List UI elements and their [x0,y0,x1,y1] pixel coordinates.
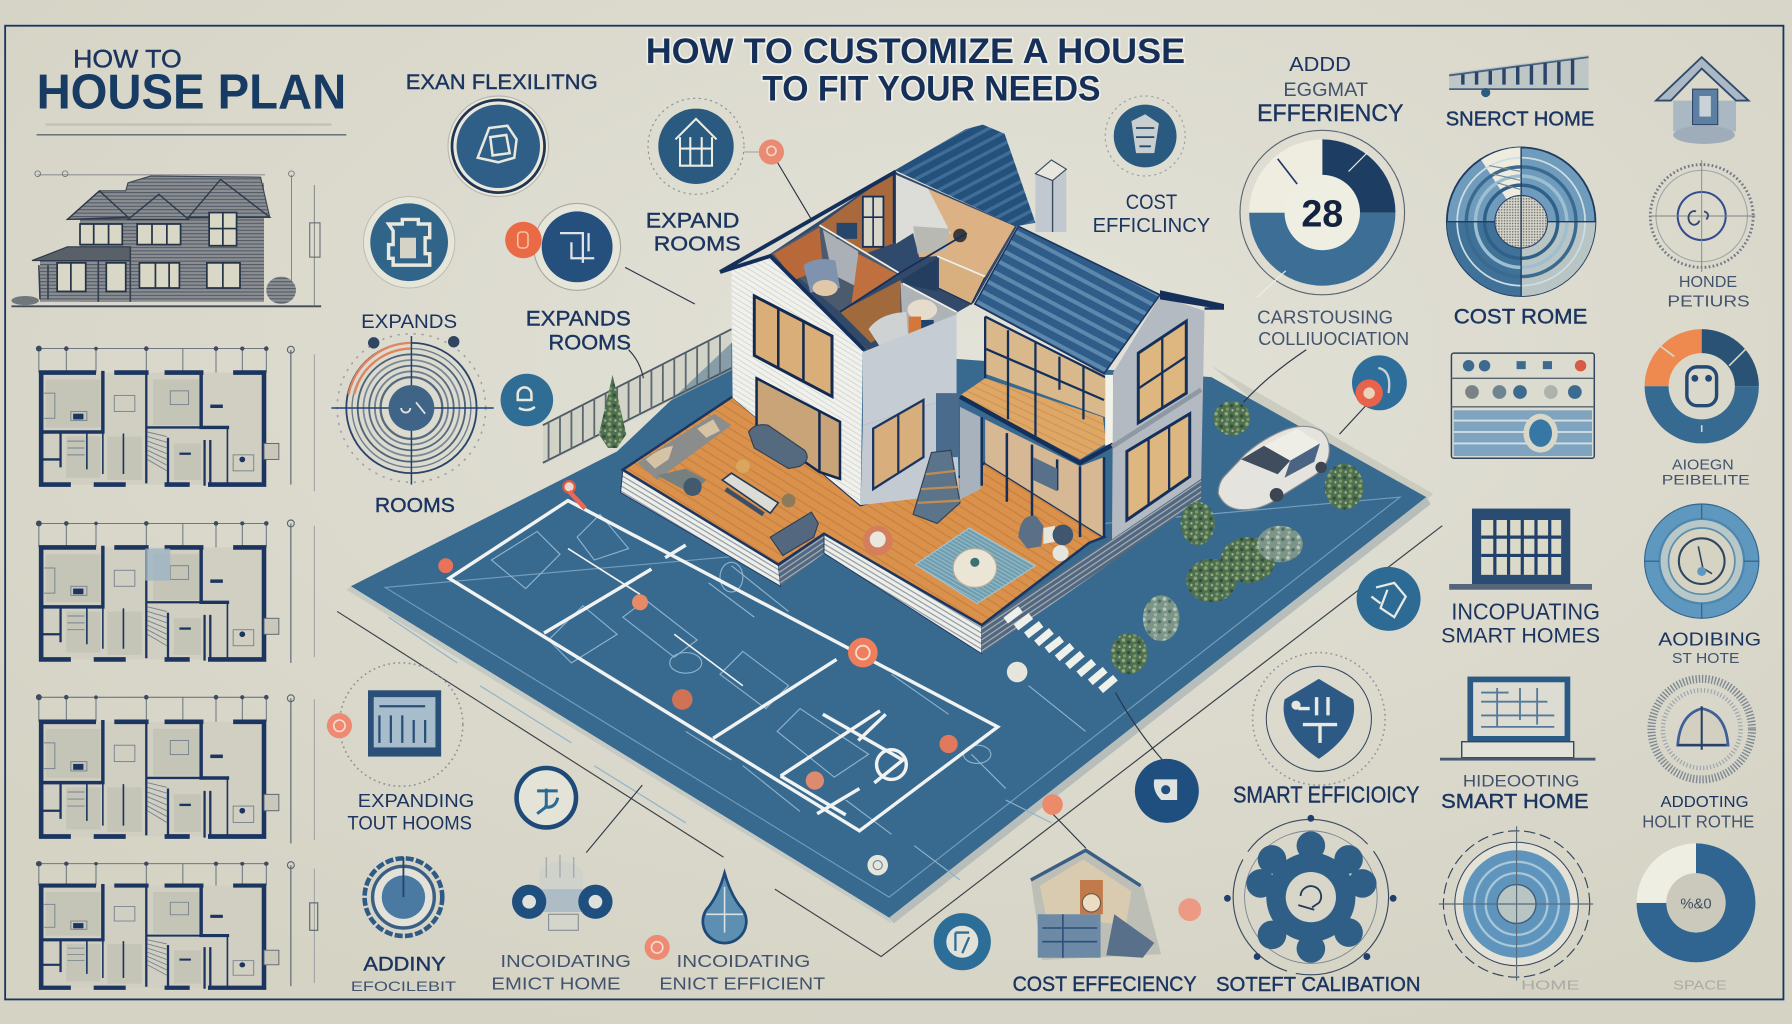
icon: navy circle [1135,759,1199,823]
fence [543,329,731,465]
icon: gauge [365,857,442,936]
subtitle: how to house plan [37,45,346,135]
small cutaway house [1031,850,1161,960]
room d [903,256,985,304]
label: rooms: ROOMS [375,494,455,517]
label: expand rooms [646,207,741,255]
callout pin: house top [1042,794,1063,815]
plan dimension lines [287,346,318,986]
orange pouf [863,526,893,555]
gauge ring [1650,160,1755,272]
floor plan 2 [36,520,279,659]
label: aiogen perielite: AIOEGN [1672,458,1734,474]
label: adding home: AODIBING [1658,629,1761,650]
sofa front [770,512,818,555]
icon: house right [1656,57,1749,144]
donut chart: 28: 28 [1301,192,1343,234]
label: customizing calibration: CARSTOUSING [1257,306,1393,327]
donut chart: orange [1645,329,1759,443]
label: home faint: HOME [1521,979,1579,993]
label: smart efficiency: SMART EFFICIOICY [1233,781,1419,807]
label: cost efficiency top: EFFICLINCY [1093,214,1211,237]
label: adding home: ST HOTE [1672,651,1740,667]
label: adding hout home: HOLIT ROTHE [1642,811,1754,831]
label: adding hout home: ADDOTING [1661,794,1749,811]
main title: HOW TO CUSTOMIZE A HOUSE [646,31,1185,71]
callout pin: house right [1178,898,1201,921]
donut chart: quarter: %&0 [1680,897,1712,913]
rear roof [895,125,1035,226]
icon: twin speakers [512,855,613,930]
callout pin: expand rooms [759,139,811,219]
car [1218,426,1329,510]
label: incorporating efficient [659,951,826,994]
chairs [1018,516,1073,561]
donut chart: quarter [1637,843,1755,962]
callout pin: expanding [327,713,352,738]
label: expanding rooms [347,790,474,835]
label: cost rome: COST ROME [1454,303,1587,328]
house elevation drawing [11,171,321,306]
mesh ring [1651,679,1752,779]
label: adding energy efficiency: EGGMAT [1283,79,1368,101]
lower front room [982,417,1104,537]
radar diagram [1439,826,1593,981]
label: expands rooms [526,306,631,355]
round table [953,549,997,587]
label: incorporating smart homes: SMART HOMES [1441,622,1600,647]
room c [880,175,1015,277]
right upper window [1138,321,1186,423]
label: incorporating smart home: HIDEOOTING [1463,771,1579,790]
tree [599,375,626,448]
target ring diagram [331,334,494,485]
label: adding energy efficiency [1257,53,1403,127]
gear diagram [1224,815,1397,975]
icon: water drop [703,873,746,943]
label: space faint: SPACE [1673,979,1727,993]
room a [770,225,899,312]
label: incorporating smart home: INCOIDATING [501,951,631,971]
room b [819,171,894,254]
label: customizing calibration [1257,306,1409,349]
plan markers [438,481,1027,875]
label: customizing calibration: COLLIUOCIATION [1258,328,1409,349]
label: adding energy efficiency: ADDD [1289,53,1351,76]
label: expands rooms: ROOMS [549,330,631,355]
main title: TO FIT YOUR NEEDS [762,69,1101,109]
grey side wall [863,314,957,425]
label: home features [1667,274,1750,310]
label: adding efficient: ADDINY [363,953,446,975]
label: expands: EXPANDS [361,311,457,333]
label: cost efficiency bottom: COST EFFECIENCY [1013,971,1197,996]
label: expand rooms: EXPAND [646,207,739,232]
label: expanding rooms: EXPANDING [358,790,474,811]
house model [621,125,1224,654]
label: adding energy efficiency: EFFERIENCY [1257,100,1403,127]
right lower window [1127,414,1190,520]
eave edges [720,171,896,350]
bushes [1111,401,1363,674]
label: exan flexilitng: EXAN FLEXILITNG [406,69,598,94]
icon: expanding rooms monitor [339,663,463,786]
site boundary lines [337,526,1442,957]
right gable wall [1112,296,1205,539]
label: aiogen perielite [1662,458,1750,489]
interior stair [913,450,960,523]
icon: blue and orange badge [1352,355,1407,410]
sofa rear left [638,414,731,496]
label: incorporating efficient: ENICT EFFICIENT [659,974,826,994]
label: adding efficient [351,953,456,995]
subtitle: how to house plan: HOUSE PLAN [37,66,346,120]
label: incorporating smart home [491,951,631,994]
callout lines [586,267,1366,853]
dining table [722,459,795,514]
exterior steps [1006,609,1115,690]
wood floor [623,397,1104,625]
donut chart: 28 [1240,130,1405,297]
label: snerct home: SNERCT HOME [1446,108,1594,131]
icon: blue arrows badge [1357,567,1421,631]
subtitle: how to house plan: HOW TO [73,45,182,73]
rug [915,528,1035,603]
upper front room [960,317,1113,463]
label: adding hout home [1642,794,1754,831]
icon: shield badge [1253,653,1385,785]
floor plan 1 [36,346,279,485]
main title [646,31,1185,109]
upper left window [754,296,832,397]
label: adding efficient: EFOCILEBIT [351,979,456,995]
sofa rear right [749,425,807,469]
white gable wall [731,257,863,505]
label: incorporating smart home: EMICT HOME [491,974,621,994]
settings panel [1451,353,1594,458]
label: incorporating smart home: SMART HOME [1441,790,1589,813]
label: expands rooms: EXPANDS [526,306,631,331]
icon: blue ring badge [934,913,991,970]
label: expand rooms: ROOMS [654,232,741,255]
icon: expand rooms house badge [648,98,759,194]
lower left window [757,378,840,479]
chimney [1035,160,1066,232]
floor plan 4 [36,861,279,988]
plan outline on blueprint [449,501,998,831]
icon: laptop [1440,677,1595,761]
label: incorporating smart homes [1441,598,1600,647]
label: incorporating efficient: INCOIDATING [677,951,810,971]
room e [840,280,958,349]
blueprint strip [1449,55,1589,97]
label: home features: PETIURS [1667,293,1750,310]
icon: navy ring badge [517,768,576,827]
label: cost efficiency top [1093,189,1211,237]
icon: orange rooms badge [505,203,621,290]
label: soteft calibation: SOTEFT CALIBATION [1216,973,1421,996]
label: expanding rooms: TOUT HOOMS [347,813,472,835]
stacked circle chart [1447,147,1595,296]
label: aiogen perielite: PEIBELITE [1662,473,1750,489]
label: home features: HONDE [1679,274,1737,291]
blue ring gauge [1645,504,1759,618]
front roof [975,226,1224,374]
icon: flexibility badge [448,96,549,197]
label: adding home [1658,629,1761,667]
icon: blue circle [501,374,553,426]
icon: cost badge [1105,96,1185,176]
label: cost efficiency top: COST [1126,189,1177,214]
callout pin: incorporating [645,935,670,960]
upper interior rooms [770,171,1017,370]
blueprint site [346,343,1433,923]
slab sides [621,470,1201,654]
label: incorporating smart homes: INCOPUATING [1451,598,1600,624]
icon: monitor with grid [1449,509,1592,590]
label: incorporating smart home [1441,771,1589,813]
icon: layout badge [363,197,455,288]
lower centre doors [873,393,981,499]
right wall belt [1112,390,1201,447]
floor plan 3 [36,694,279,836]
